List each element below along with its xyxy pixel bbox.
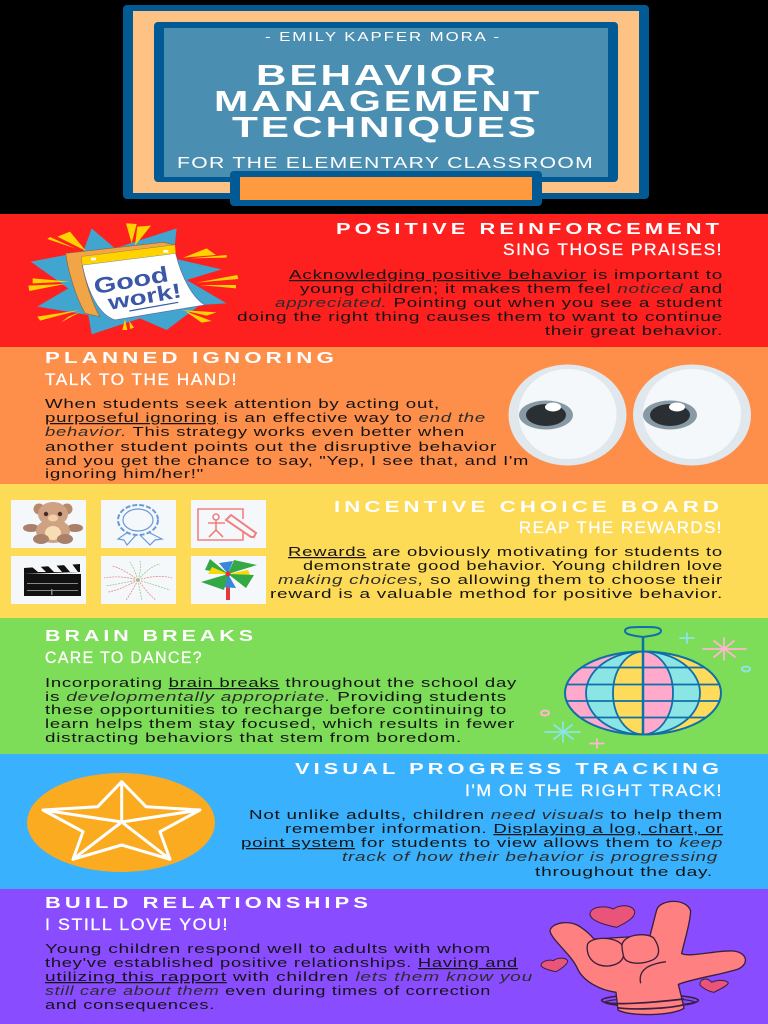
title: MANAGEMENT <box>214 86 542 118</box>
tagline: SING THOSE PRAISES! <box>503 240 723 259</box>
body text: behavior. This strategy works even better when <box>45 425 465 439</box>
body text: and you get the chance to say, "Yep, I see that, and I'm <box>45 454 529 468</box>
body text: learn helps them stay focused, which results in fewer <box>45 717 515 731</box>
body text: track of how their behavior is progressing <box>342 850 718 864</box>
heading: POSITIVE REINFORCEMENT <box>336 221 723 238</box>
body text: utilizing this rapport with children lets them know you <box>45 970 533 984</box>
heading: VISUAL PROGRESS TRACKING <box>295 761 723 778</box>
body text: remember information. Displaying a log, chart, or <box>285 822 723 836</box>
panel: planned ignoring <box>0 347 768 484</box>
body text: they've established positive relationships. Having and <box>45 956 518 970</box>
body text: Not unlike adults, children need visuals to help them <box>249 808 723 822</box>
icon: star badge <box>27 773 215 872</box>
author credit: - EMILY KAPFER MORA - <box>265 29 501 44</box>
body text <box>45 397 529 481</box>
body text: point system for students to view allows them to keep <box>241 836 723 850</box>
body text <box>270 545 723 601</box>
icon: clapperboard tile <box>11 556 86 604</box>
panel: brain breaks <box>0 618 768 754</box>
body text <box>45 676 517 745</box>
panel: positive reinforcement <box>0 214 768 347</box>
body text: demonstrate good behavior. Young children love <box>303 559 723 573</box>
icon: disco ball <box>541 627 750 748</box>
title <box>214 60 542 144</box>
heading: PLANNED IGNORING <box>45 350 338 367</box>
body text: When students seek attention by acting out, <box>45 397 440 411</box>
body text: Rewards are obviously motivating for students to <box>288 545 723 559</box>
panel: build relationships <box>0 889 768 1024</box>
calendar text <box>92 260 183 317</box>
icon: good work calendar <box>28 223 238 334</box>
body text: their great behavior. <box>545 324 723 338</box>
body text: reward is a valuable method for positive behavior. <box>270 587 723 601</box>
body text: is developmentally appropriate. Providing students <box>45 690 507 704</box>
body text: appreciated. Pointing out when you see a student <box>275 296 723 310</box>
tagline: REAP THE REWARDS! <box>519 518 723 537</box>
body text: throughout the day. <box>535 865 713 879</box>
body text: Young children respond well to adults with whom <box>45 942 491 956</box>
panel: incentive choice board <box>0 484 768 618</box>
body text: Incorporating brain breaks throughout the school day <box>45 676 517 690</box>
heading: BRAIN BREAKS <box>45 628 257 645</box>
body text <box>237 268 723 338</box>
heading: INCENTIVE CHOICE BOARD <box>334 499 723 516</box>
body text: making choices, so allowing them to choose their <box>278 573 723 587</box>
icon: teddy bear tile <box>11 500 86 548</box>
body text: another student points out the disruptive behavior <box>45 440 497 454</box>
icon: I love you hand sign <box>541 901 745 1015</box>
icon: drawing tile <box>191 500 266 548</box>
icon: ribbon tile <box>101 500 176 548</box>
heading: BUILD RELATIONSHIPS <box>45 895 372 912</box>
body text: doing the right thing causes them to want to continue <box>237 310 723 324</box>
calendar text: Good <box>92 261 170 299</box>
body text: Acknowledging positive behavior is important to <box>289 268 723 282</box>
body text: ignoring him/her!" <box>45 467 204 481</box>
icon: pinwheel tile <box>191 556 266 604</box>
body text <box>45 942 533 1012</box>
title: BEHAVIOR <box>256 60 499 92</box>
header: chalkboard title <box>123 5 649 206</box>
body text: distracting behaviors that stem from boredom. <box>45 731 462 745</box>
icon: fireworks tile <box>101 556 176 604</box>
body text: still care about them even during times of correction <box>45 984 491 998</box>
panel: visual progress tracking <box>0 754 768 889</box>
tagline: I'M ON THE RIGHT TRACK! <box>465 781 723 800</box>
sparkles <box>541 633 750 748</box>
body text <box>241 808 723 879</box>
icon: side-eye eyes <box>508 364 751 466</box>
body text: and consequences. <box>45 998 215 1012</box>
calendar text: work! <box>105 279 183 315</box>
body text: purposeful ignoring is an effective way to end the <box>45 411 486 425</box>
subtitle: FOR THE ELEMENTARY CLASSROOM <box>177 155 594 172</box>
body text: these opportunities to recharge before continuing to <box>45 703 507 717</box>
title: TECHNIQUES <box>232 112 539 144</box>
tagline: TALK TO THE HAND! <box>45 370 238 389</box>
body text: young children; it makes them feel noticed and <box>300 282 723 296</box>
tagline: CARE TO DANCE? <box>45 648 203 667</box>
tagline: I STILL LOVE YOU! <box>45 915 229 934</box>
